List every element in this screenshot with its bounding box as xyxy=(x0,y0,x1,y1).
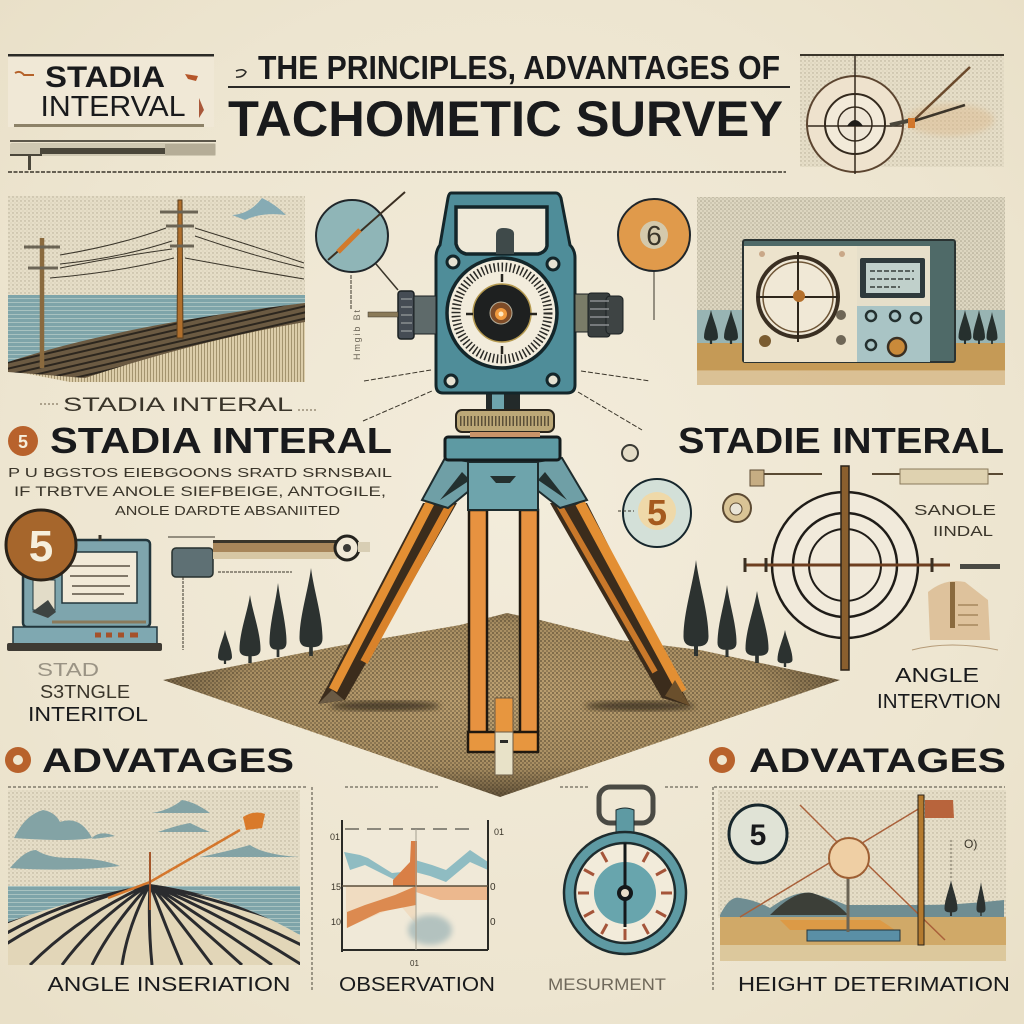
trees: right group xyxy=(684,560,792,667)
panel: left scene with utility poles xyxy=(8,196,305,382)
label: angle inseriation: ANGLE INSERIATION xyxy=(48,974,290,996)
title xyxy=(228,49,790,147)
label: angle intervtion: ANGLE xyxy=(895,665,979,687)
panel: height determination scene xyxy=(718,790,1006,961)
panel: height determination scene: 5 xyxy=(750,819,766,852)
leader lines around instrument xyxy=(363,370,650,430)
label: sangle indal: SANOLE xyxy=(914,502,996,519)
label: angle intervtion: INTERVTION xyxy=(877,691,1001,713)
callout: teal five circle: 5 xyxy=(647,492,667,533)
label: height deteriation: HEIGHT DETERIMATION xyxy=(738,974,1010,996)
icon: surveying rod xyxy=(168,536,370,650)
text block: left paragraph: ANOLE DARDTE ABSANIITED xyxy=(115,503,340,518)
text block: left paragraph: IF TRBTVE ANOLE SIEFBEIGE, ANTOGILE, xyxy=(14,484,386,499)
chart: observation line chart xyxy=(330,820,504,968)
label: stadia single interitol: STAD xyxy=(37,660,99,680)
label: sangle indal xyxy=(914,502,996,540)
chart: observation line chart: 01 xyxy=(410,959,419,968)
chart: observation line chart: 0 xyxy=(490,917,496,928)
icon: laptop computer xyxy=(7,535,162,651)
chart: observation line chart: 15 xyxy=(331,882,341,892)
panel: top-left stadia interval sign xyxy=(8,54,216,170)
heading: advantages right xyxy=(709,742,1006,780)
label: stadia single interitol xyxy=(28,660,148,726)
chart: observation line chart: 01 xyxy=(330,832,340,842)
divider dotted rules xyxy=(8,787,1005,990)
divider dotted rule xyxy=(8,171,786,173)
text block: left paragraph: P U BGSTOS EIEBGOONS SRATD SRNSBAIL xyxy=(8,465,392,480)
chart: observation line chart: 01 xyxy=(494,827,504,837)
heading: advantages right: ADVATAGES xyxy=(749,742,1006,780)
label: stadia single interitol: INTERITOL xyxy=(28,704,148,726)
panel: angle insertion scene xyxy=(8,790,300,965)
icon: number five badge xyxy=(6,510,76,580)
illustration: tripod xyxy=(318,437,690,775)
heading: advantages left: ADVATAGES xyxy=(42,742,294,780)
callout: left needle circle xyxy=(316,192,405,360)
icon: number five badge: 5 xyxy=(29,522,53,571)
label: stadia single interitol: S3TNGLE xyxy=(40,682,130,702)
panel: top-right target scene xyxy=(800,54,1004,174)
chart: observation line chart: 0 xyxy=(490,882,496,893)
label: stadia interal small xyxy=(40,395,318,416)
callout: orange number circle: 6 xyxy=(646,220,662,251)
heading: stadie interal right: STADIE INTERAL xyxy=(678,420,1004,461)
callout: teal five circle xyxy=(618,445,751,547)
panel: top-left stadia interval sign: INTERVAL xyxy=(40,91,186,123)
panel: top-left stadia interval sign: STADIA xyxy=(45,61,165,94)
trees: left group xyxy=(218,568,322,664)
panel: height determination scene: O) xyxy=(964,837,977,851)
panel: right scene with instrument console xyxy=(697,197,1005,385)
text block: left paragraph xyxy=(8,465,392,518)
label: observation: OBSERVATION xyxy=(339,974,495,996)
heading: stadia interal left: 5 xyxy=(18,432,28,452)
title: THE PRINCIPLES, ADVANTAGES OF xyxy=(258,49,780,86)
callout: orange number circle xyxy=(618,199,690,320)
label: angle intervtion xyxy=(877,665,1001,713)
label: sangle indal: IINDAL xyxy=(933,523,993,540)
illustration: theodolite instrument xyxy=(368,193,623,437)
chart: observation line chart: 10 xyxy=(331,917,341,927)
terrain: central ground plane xyxy=(163,613,840,797)
diagram: crosshair target xyxy=(745,466,1003,670)
label: stadia interal small: STADIA INTERAL xyxy=(63,395,293,416)
title: TACHOMETIC SURVEY xyxy=(228,91,783,147)
heading: stadia interal left: STADIA INTERAL xyxy=(50,420,392,461)
icon: stopwatch compass xyxy=(564,787,686,954)
icon: small map sketch xyxy=(912,581,998,650)
label: mesurment: MESURMENT xyxy=(548,975,666,994)
callout: left needle circle: Hmgib Bt xyxy=(352,310,362,360)
